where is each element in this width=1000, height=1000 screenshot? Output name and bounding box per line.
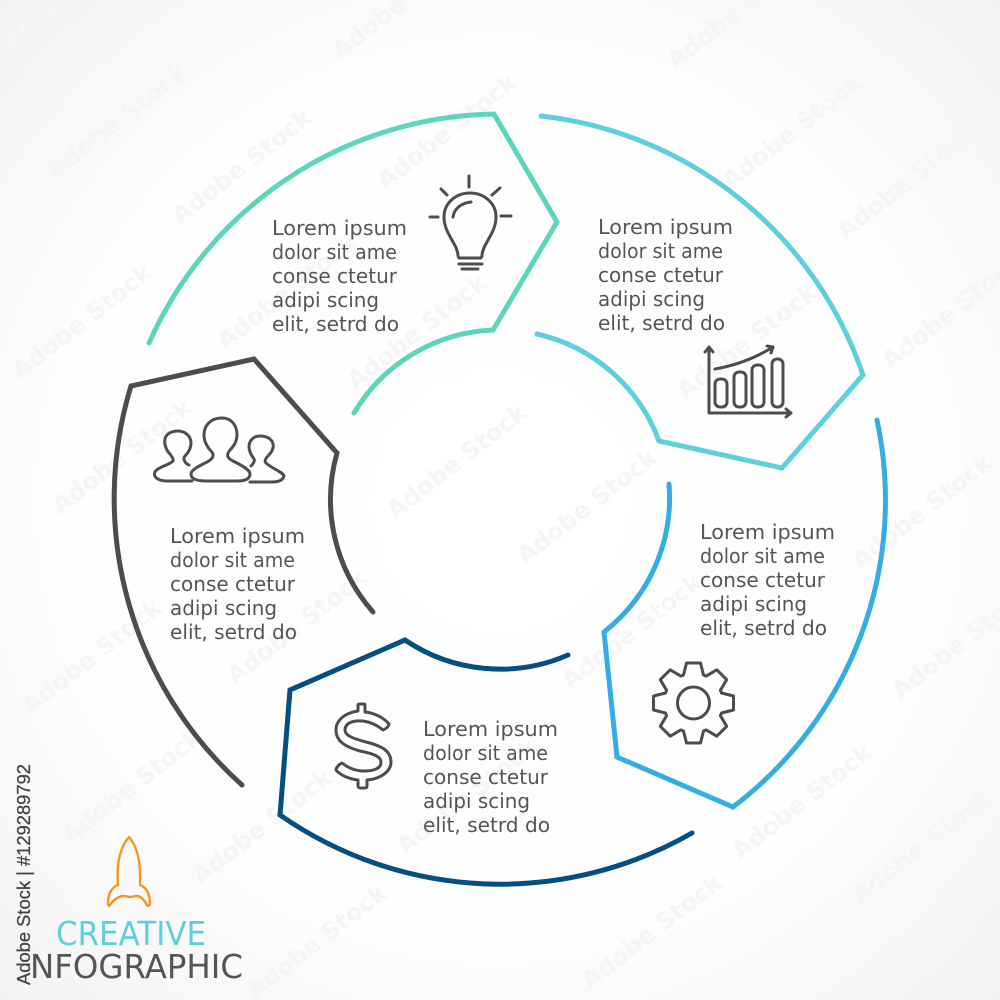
- brand: creative infographic: [30, 914, 243, 986]
- text: Adobe Stock: [341, 268, 493, 395]
- text: Adobe Stock: [831, 118, 983, 245]
- text: Adobe Stock: [846, 783, 998, 910]
- text: blue segment: [700, 520, 835, 640]
- text: gray segment: adipi scing: [170, 596, 277, 620]
- text: blue segment: dolor sit ame: [700, 544, 825, 568]
- icon: light bulb: [430, 176, 511, 269]
- segment: light blue: [537, 116, 863, 468]
- icon: rocket: [108, 837, 150, 906]
- text: light blue segment: adipi scing: [598, 287, 705, 311]
- text: Adobe Stock: [556, 568, 708, 695]
- text: Adobe Stock: [56, 723, 208, 850]
- text: Adobe Stock: [381, 398, 533, 525]
- text: gray segment: elit, setrd do: [170, 620, 297, 644]
- text: navy segment: adipi scing: [423, 789, 530, 813]
- text: Adobe Stock: [6, 258, 158, 385]
- text: Adobe Stock: [391, 733, 543, 860]
- text: teal segment: elit, setrd do: [272, 312, 399, 336]
- icon: dollar sign: [336, 704, 391, 788]
- segment: blue: [604, 420, 885, 807]
- text: Adobe Stock: [211, 228, 363, 355]
- segment: gray: [114, 359, 373, 785]
- text: blue segment: Lorem ipsum: [700, 520, 835, 544]
- text: Adobe Stock: [726, 738, 878, 865]
- text: Adobe Stock: [221, 563, 373, 690]
- text: gray segment: dolor sit ame: [170, 548, 295, 572]
- text: navy segment: elit, setrd do: [423, 813, 550, 837]
- brand: creative infographic: CREATIVE: [56, 914, 206, 953]
- text: Adobe Stock: [46, 393, 198, 520]
- text: Adobe Stock: [716, 68, 868, 195]
- text: navy segment: conse ctetur: [423, 765, 549, 789]
- text: light blue segment: [598, 215, 733, 335]
- text: navy segment: [423, 717, 558, 837]
- text: Adobe Stock: [186, 763, 338, 890]
- text: blue segment: elit, setrd do: [700, 616, 827, 640]
- text: Adobe Stock: [511, 443, 663, 570]
- text: Adobe Stock: [371, 68, 523, 195]
- text: light blue segment: dolor sit ame: [598, 239, 723, 263]
- icon: people: [154, 418, 284, 482]
- text: teal segment: [272, 216, 407, 336]
- text: gray segment: Lorem ipsum: [170, 524, 305, 548]
- text: light blue segment: Lorem ipsum: [598, 215, 733, 239]
- text: navy segment: Lorem ipsum: [423, 717, 558, 741]
- brand: creative infographic: NFOGRAPHIC: [30, 947, 243, 986]
- text: teal segment: dolor sit ame: [272, 240, 397, 264]
- text: blue segment: conse ctetur: [700, 568, 826, 592]
- text: Adobe Stock: [16, 593, 168, 720]
- text: light blue segment: conse ctetur: [598, 263, 724, 287]
- text: teal segment: Lorem ipsum: [272, 216, 407, 240]
- segment: teal: [149, 114, 557, 413]
- text: teal segment: adipi scing: [272, 288, 379, 312]
- text: Adobe Stock: [41, 58, 193, 185]
- text: blue segment: adipi scing: [700, 592, 807, 616]
- text: navy segment: dolor sit ame: [423, 741, 548, 765]
- segment: navy: [280, 640, 692, 884]
- text: Adobe Stock: [166, 103, 318, 230]
- icon: gear: [654, 663, 734, 743]
- adobe stock id: Adobe Stock | #129289792: [14, 764, 34, 985]
- text: Adobe Stock: [671, 278, 823, 405]
- text: gray segment: [170, 524, 305, 644]
- text: light blue segment: elit, setrd do: [598, 311, 725, 335]
- text: Adobe Stock: [576, 868, 728, 995]
- text: teal segment: conse ctetur: [272, 264, 398, 288]
- icon: bar chart: [705, 346, 791, 417]
- text: gray segment: conse ctetur: [170, 572, 296, 596]
- text: Adobe Stock: [846, 448, 998, 575]
